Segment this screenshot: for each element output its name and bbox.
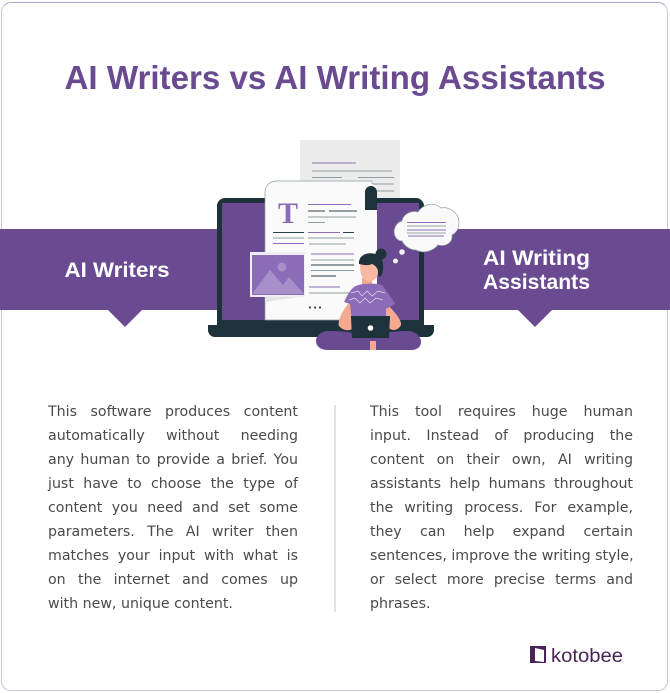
legs [316, 331, 421, 350]
arms [339, 303, 357, 330]
text block: AI Writing Assistants description: input. Instead of producing the [370, 428, 633, 444]
small laptop [351, 316, 390, 338]
shirt [344, 284, 395, 322]
text block: AI Writers description: with new, unique content. [48, 596, 233, 612]
text block: AI Writing Assistants description: they can help expand certain [370, 524, 633, 540]
text block: AI Writers description: any human to provide a brief. You [48, 452, 298, 468]
back document [300, 140, 400, 210]
image card [250, 252, 305, 302]
text block: AI Writers description: automatically without needing [48, 428, 298, 444]
main document [265, 181, 377, 320]
text block: AI Writing Assistants description: or select more precise terms and [370, 572, 633, 588]
text block: AI Writing Assistants description [370, 404, 634, 612]
logo: kotobee: kotobee [551, 645, 623, 667]
text block: AI Writers description: content you need and set some [48, 500, 298, 516]
banner pointer left [108, 310, 142, 327]
text block: AI Writing Assistants description: phrases. [370, 596, 431, 612]
banner [0, 229, 670, 327]
text block: AI Writers description: This software produces content [48, 404, 298, 420]
laptop [208, 198, 434, 337]
hair bun [376, 248, 386, 260]
text block: AI Writing Assistants description: the writing process. For example, [370, 500, 633, 516]
icon: letter T: T [278, 197, 298, 230]
text block: AI Writers description: parameters. The AI writer then [48, 524, 298, 540]
text block: AI Writers description: matches your input with what is [48, 548, 298, 564]
heading: AI Writing Assistants: AI Writing [483, 247, 590, 270]
text block: AI Writing Assistants description: sentences, improve the writing style, [370, 548, 634, 564]
woman [316, 248, 421, 350]
text block: AI Writers description [48, 404, 298, 612]
title: AI Writers vs AI Writing Assistants [64, 59, 606, 96]
heading: AI Writing Assistants: Assistants [483, 271, 590, 294]
text block: AI Writers description: on the internet and comes up [48, 572, 298, 588]
heading: AI Writing Assistants [483, 247, 590, 294]
heading: AI Writers: AI Writers [64, 259, 170, 282]
column divider [334, 405, 336, 612]
hair [359, 253, 383, 277]
face [360, 262, 378, 281]
text block: AI Writing Assistants description: assistants help humans throughout [370, 476, 633, 492]
text block: AI Writing Assistants description: This tool requires huge human [370, 404, 633, 420]
logo mark [530, 646, 546, 663]
neck [362, 278, 372, 288]
thought bubble [393, 204, 459, 264]
illustration: laptop, documents and woman [208, 140, 459, 350]
banner pointer right [518, 310, 552, 327]
text block: AI Writers description: just have to choose the type of [48, 476, 298, 492]
text block: AI Writing Assistants description: content on their own, AI writing [370, 452, 633, 468]
